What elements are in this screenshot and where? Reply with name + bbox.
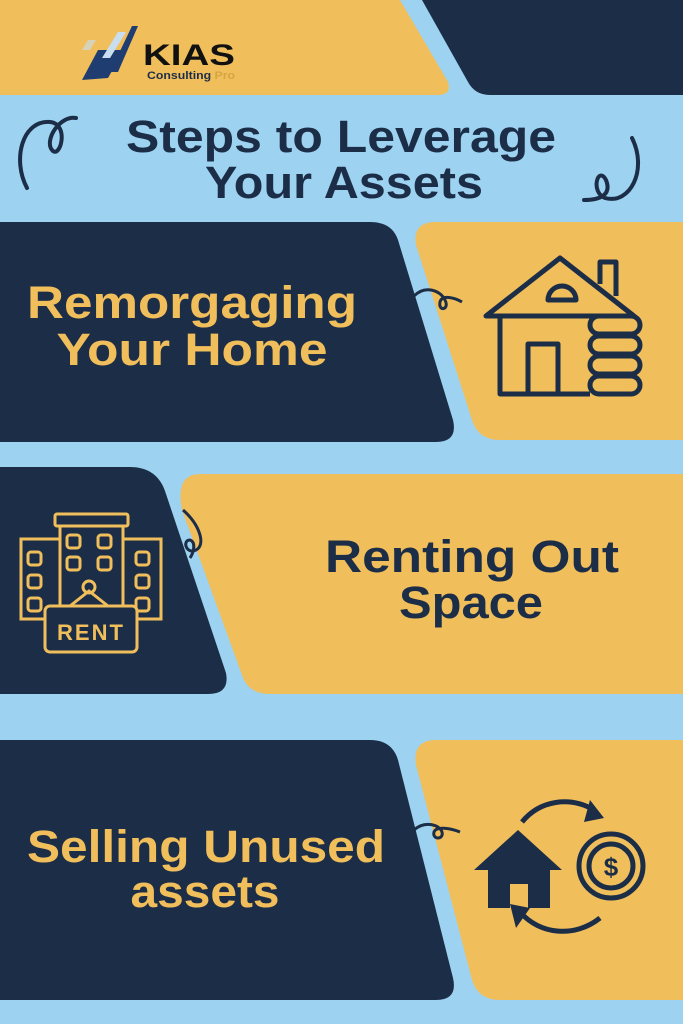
logo: Consulting Pro [147, 70, 235, 82]
panel 3 navy: assets [130, 866, 280, 917]
panel 2 yellow: Renting Out [325, 531, 619, 582]
panel 2 navy with rent icon [0, 467, 227, 694]
panel 2 yellow: Space [399, 577, 543, 628]
panel 3 yellow with exchange icon: $ [604, 852, 619, 882]
title [126, 111, 556, 208]
header navy band [422, 0, 683, 95]
title: Your Assets [205, 157, 483, 208]
panel 2 yellow [180, 474, 683, 694]
panel 3 navy [0, 740, 454, 1000]
header yellow band [0, 0, 449, 95]
title: Steps to Leverage [126, 111, 556, 162]
panel 2 navy with rent icon: RENT [57, 620, 125, 645]
panel 3 navy: Selling Unused [27, 821, 385, 872]
panel 3 yellow with exchange icon [414, 740, 683, 1000]
panel 1 yellow with house icon [414, 222, 683, 440]
logo: KIAS [143, 39, 235, 72]
squiggle left [20, 118, 76, 188]
panel 1 navy [0, 222, 454, 442]
logo [82, 26, 235, 82]
squiggle right [584, 138, 638, 200]
panel 1 navy: Remorgaging [27, 277, 357, 328]
panel 1 navy: Your Home [56, 324, 328, 375]
